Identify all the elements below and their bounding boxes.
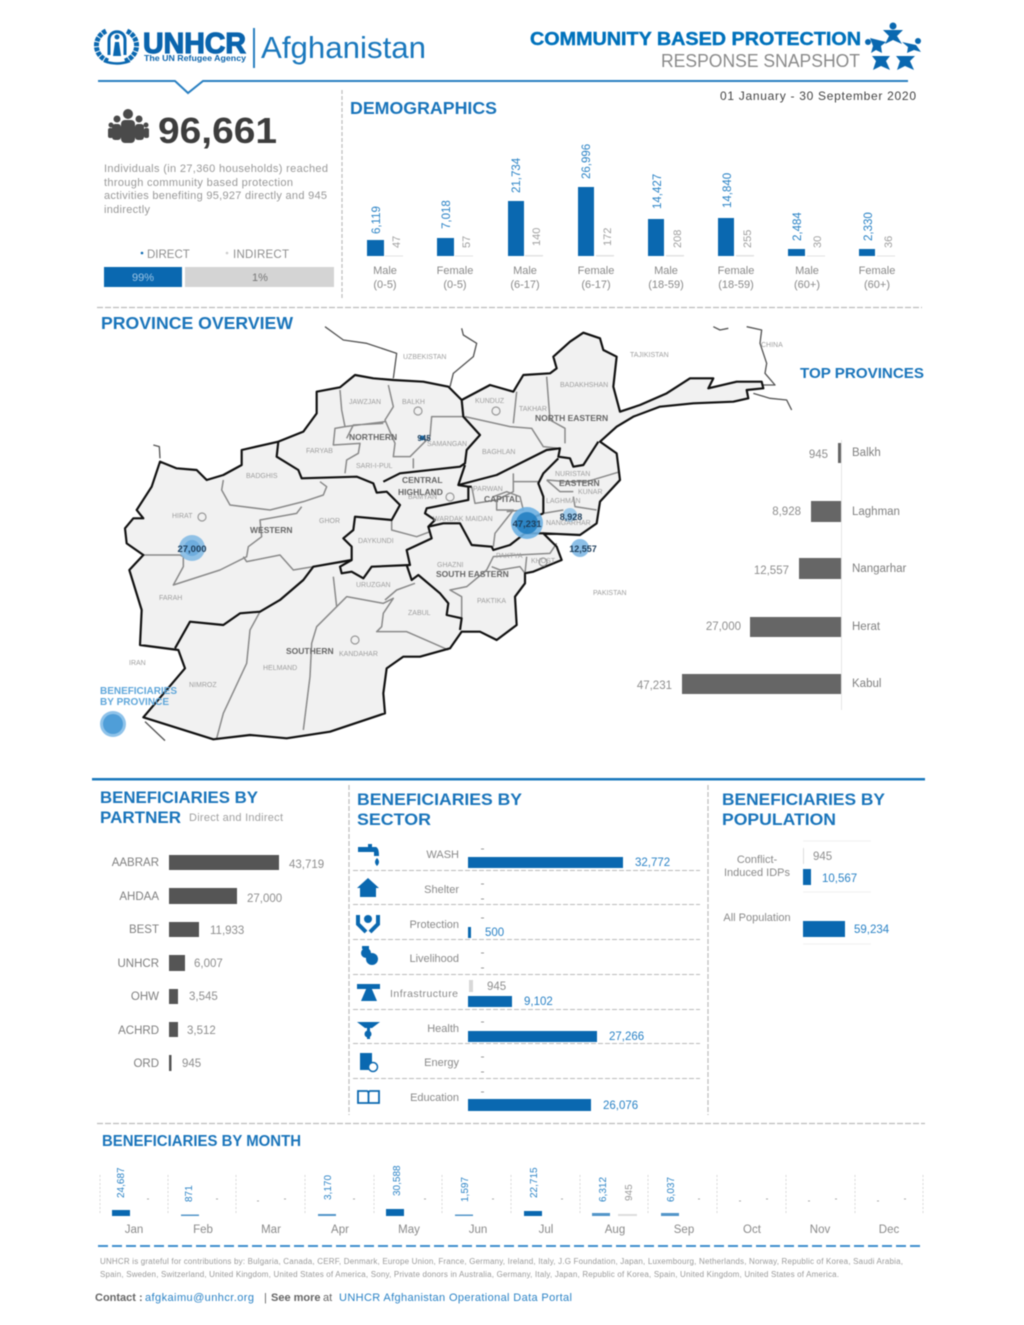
province and neighbour labels: LAGHMAN (546, 498, 581, 505)
bar chart: demographics: 21,734 (511, 157, 523, 193)
bar chart: demographics: 30 (812, 236, 824, 248)
sector labels: Shelter (424, 884, 459, 896)
sector values: 26,076 (603, 1100, 638, 1112)
panel: beneficiaries by partner: AHDAA (119, 891, 159, 903)
country name: Afghanistan (261, 30, 426, 65)
icon: infrastructure road (357, 984, 380, 1001)
province and neighbour labels: UZBEKISTAN (403, 354, 446, 361)
month labels (125, 1224, 899, 1236)
province and neighbour labels: PAKTYA (496, 553, 523, 560)
sector labels: Protection (409, 919, 459, 931)
map reference rings (198, 407, 547, 644)
sector labels: Infrastructure (390, 988, 458, 1000)
panel: beneficiaries by partner (100, 789, 324, 1071)
bar chart: demographics: 36 (883, 236, 895, 248)
total beneficiaries: 96,661 (158, 110, 277, 151)
map: Afghanistan provinces: HIGHLAND (398, 487, 443, 497)
panel: beneficiaries by population (722, 790, 890, 944)
bar chart: demographics: 172 (602, 228, 614, 246)
month values: 22,715 (529, 1167, 540, 1198)
panel: beneficiaries by population: 10,567 (822, 873, 857, 885)
province and neighbour labels: FARAH (159, 595, 182, 602)
province and neighbour labels: BADAKHSHAN (560, 382, 608, 389)
province and neighbour labels: HELMAND (263, 665, 297, 672)
bar chart: demographics: 2,330 (863, 212, 875, 241)
province and neighbour labels: URUZGAN (356, 582, 391, 589)
footer: contact: See more (271, 1292, 321, 1304)
month labels: May (398, 1224, 420, 1236)
province and neighbour labels: WARDAK MAIDAN (433, 516, 493, 523)
bar chart: demographics: Male (795, 265, 819, 277)
province and neighbour labels: GHAZNI (437, 562, 464, 569)
report title (530, 29, 861, 71)
bar chart: demographics (367, 144, 895, 291)
panel: beneficiaries by population: Conflict- (737, 854, 778, 866)
bar chart: demographics: (6-17) (581, 279, 611, 291)
panel: beneficiaries by partner: OHW (131, 991, 159, 1003)
footer: contact: Contact : (95, 1292, 143, 1304)
bar chart: top provinces: 27,000 (706, 621, 741, 633)
month values: 6,312 (598, 1177, 609, 1202)
neighbouring borders (145, 327, 792, 741)
province and neighbour labels: BAMYAN (408, 494, 437, 501)
month values: 3,170 (323, 1175, 334, 1200)
heading: province overview: PROVINCE OVERVIEW (101, 313, 293, 333)
month labels: Apr (331, 1224, 349, 1236)
bar chart: demographics: 2,484 (792, 212, 804, 241)
panel: beneficiaries by population: 945 (813, 851, 832, 863)
month values: 6,037 (666, 1177, 677, 1202)
month values (116, 1165, 677, 1202)
sector bars (468, 857, 623, 1111)
direct vs indirect bar (104, 267, 334, 287)
map legend: BY PROVINCE (100, 697, 169, 708)
province and neighbour labels: KUNAR (578, 489, 603, 496)
panel: beneficiaries by partner: 3,545 (189, 991, 218, 1003)
bar chart: demographics: (6-17) (510, 279, 540, 291)
province and neighbour labels: KUNDUZ (475, 398, 505, 405)
panel: beneficiaries by population: Induced IDPs (724, 867, 791, 879)
sector labels: Energy (424, 1057, 459, 1069)
description: Individuals (in 27,360 households) reached (104, 163, 328, 175)
province and neighbour labels: NIMROZ (189, 682, 217, 689)
month labels: Nov (810, 1224, 830, 1236)
icon: education book (358, 1091, 379, 1103)
bar chart: top provinces: 12,557 (754, 565, 789, 577)
province and neighbour labels: BAGHLAN (482, 449, 515, 456)
panel: beneficiaries by partner: UNHCR (117, 958, 159, 970)
map: Afghanistan provinces: EASTERN (559, 478, 600, 488)
map: Afghanistan provinces: CAPITAL (484, 494, 520, 504)
legend: INDIRECT (233, 249, 289, 261)
province and neighbour labels: KHOST (531, 558, 556, 565)
bar chart: demographics: Male (373, 265, 397, 277)
panel: beneficiaries by partner: ORD (133, 1058, 159, 1070)
panel: beneficiaries by partner: 43,719 (289, 859, 324, 871)
bar chart: demographics: 47 (391, 236, 403, 248)
month bars (112, 1209, 679, 1216)
map: Afghanistan provinces: NORTH EASTERN (535, 413, 608, 423)
report title: COMMUNITY BASED PROTECTION (530, 29, 861, 49)
sector values (485, 857, 670, 1112)
panel: beneficiaries by partner: 27,000 (247, 893, 282, 905)
province and neighbour labels: TAJIKISTAN (630, 352, 669, 359)
wordmark: UNHCR (143, 28, 246, 60)
icon: five blue figures in star ring (865, 22, 921, 70)
month labels: Feb (193, 1224, 213, 1236)
bar chart: demographics: 14,840 (722, 173, 734, 208)
province and neighbour labels: HIRAT (172, 513, 193, 520)
province and neighbour labels: IRAN (129, 660, 146, 667)
panel: beneficiaries by partner: ACHRD (118, 1025, 159, 1037)
map legend: BENEFICIARIES (100, 686, 177, 697)
region boundaries (125, 333, 763, 739)
description: activities benefiting 95,927 directly and 945 (104, 190, 327, 202)
bubble values: 8,928 (560, 512, 582, 522)
province and neighbour labels: SARI-I-PUL (356, 463, 393, 470)
footer: donors: Spain, Sweden, Switzerland, United Kingdom, United States of America, Sony, Private donors in Australia, Germany, Italy, Japan, Republic of Korea, Spain, United Kingdom, United States of America. (100, 1270, 839, 1279)
sector values: 500 (485, 927, 504, 939)
province and neighbour labels: KANDAHAR (339, 651, 378, 658)
month values: 30,588 (392, 1165, 403, 1196)
province and neighbour labels: JAWZJAN (349, 399, 381, 406)
bubble values (177, 434, 597, 555)
bubble values: 12,557 (569, 544, 597, 554)
icon: energy (360, 1053, 378, 1072)
month labels: Jul (539, 1224, 553, 1236)
province and neighbour labels: SAMANGAN (427, 441, 467, 448)
sector labels: Health (427, 1023, 459, 1035)
bar chart: demographics: 57 (461, 236, 473, 248)
footer: contact: | (264, 1292, 267, 1304)
month labels: Sep (674, 1224, 694, 1236)
report title: RESPONSE SNAPSHOT (661, 51, 860, 71)
bar chart: demographics: (0-5) (373, 279, 397, 291)
bar chart: demographics: (18-59) (718, 279, 754, 291)
bubble values: 47,231 (512, 519, 542, 530)
bar chart: demographics: Male (654, 265, 678, 277)
sector labels: WASH (426, 849, 459, 861)
panel: beneficiaries by month (100, 1133, 923, 1236)
bar chart: demographics: Female (578, 265, 614, 277)
bar chart: top provinces: 47,231 (637, 680, 672, 692)
direct vs indirect bar: 1% (252, 272, 268, 284)
panel: beneficiaries by partner: BEST (129, 924, 159, 936)
bar chart: top provinces (637, 440, 907, 710)
map: Afghanistan provinces: NORTHERN (349, 432, 397, 442)
province and neighbour labels: PARWAN (473, 486, 503, 493)
bar chart: demographics: (60+) (864, 279, 890, 291)
heading: top provinces: TOP PROVINCES (800, 365, 924, 382)
month values: 1,597 (460, 1177, 471, 1202)
country fill and boundary, west part coordinates (125, 327, 792, 741)
bar chart: top provinces: 945 (809, 449, 828, 461)
province and neighbour labels (129, 342, 783, 689)
bar chart: top provinces: 8,928 (772, 506, 801, 518)
sector values: 27,266 (609, 1031, 644, 1043)
footer: donors: UNHCR is grateful for contributions by: Bulgaria, Canada, CERF, Denmark, Europe Union, France, Germany, Ireland, Italy, J.G Foundation, Japan, Luxembourg, Netherlands, Norway, Republic of Korea, Saudi Arabia, (100, 1257, 903, 1266)
bar chart: demographics: 6,119 (371, 206, 383, 234)
footer: contact: afgkaimu@unhcr.org (145, 1292, 254, 1304)
sector values: 9,102 (524, 996, 553, 1008)
panel: beneficiaries by sector (353, 790, 700, 1112)
sector labels: Education (410, 1092, 459, 1104)
tagline: The UN Refugee Agency (144, 53, 246, 63)
month labels: Jan (125, 1224, 143, 1236)
header logo: UNHCR Afghanistan (96, 28, 426, 68)
bar chart: demographics: 140 (531, 228, 543, 246)
province and neighbour labels: NANGARHAR (546, 520, 591, 527)
bar chart: demographics: 255 (742, 230, 754, 248)
map: Afghanistan provinces: SOUTHERN (286, 646, 334, 656)
panel: beneficiaries by partner: Direct and Indirect (189, 812, 283, 824)
map: Afghanistan provinces: WESTERN (250, 525, 292, 535)
bar chart: top provinces: Kabul (852, 678, 881, 690)
province and neighbour labels: PAKTIKA (477, 598, 506, 605)
bar chart: demographics: 208 (672, 230, 684, 248)
footer: contact: UNHCR Afghanistan Operational Data Portal (339, 1292, 572, 1304)
month values: 871 (184, 1185, 195, 1202)
description: indirectly (104, 204, 150, 216)
panel: beneficiaries by partner: 3,512 (187, 1025, 216, 1037)
bar chart: top provinces: Nangarhar (852, 563, 907, 575)
province and neighbour labels: PAKISTAN (593, 590, 627, 597)
bar chart: demographics: (60+) (794, 279, 820, 291)
panel: beneficiaries by population: 59,234 (854, 924, 890, 936)
province and neighbour labels: BALKH (402, 399, 425, 406)
icon: livelihood (361, 946, 378, 965)
panel: beneficiaries by month: 945 (624, 1184, 635, 1201)
icon: group of people (108, 109, 149, 143)
footer: contact (95, 1292, 572, 1304)
sector labels (390, 849, 459, 1104)
heading: demographics: DEMOGRAPHICS (350, 98, 497, 118)
panel: beneficiaries by sector: 945 (487, 981, 506, 993)
month labels: Dec (879, 1224, 899, 1236)
legend: DIRECT (147, 249, 190, 261)
map: Afghanistan provinces: SOUTH EASTERN (436, 569, 509, 579)
bar chart: top provinces: Laghman (852, 506, 900, 518)
month labels: Mar (261, 1224, 281, 1236)
province lines (143, 377, 620, 738)
panel: beneficiaries by sector: SECTOR (357, 810, 431, 829)
description (104, 163, 328, 216)
icon: health caduceus (357, 1022, 380, 1039)
bar chart: demographics: (18-59) (648, 279, 684, 291)
bar chart: top provinces: Balkh (852, 447, 881, 459)
description: through community based protection (104, 177, 293, 189)
province and neighbour labels: DAYKUNDI (358, 538, 394, 545)
bar chart: demographics: Female (718, 265, 754, 277)
province and neighbour labels: ZABUL (408, 610, 431, 617)
bars (169, 855, 279, 1071)
panel: beneficiaries by population: All Population (723, 912, 791, 924)
bar chart: demographics: Female (859, 265, 895, 277)
heading: BENEFICIARIES BY (100, 789, 258, 807)
bubble values: 945 (417, 434, 431, 443)
direct vs indirect bar: 99% (132, 272, 154, 284)
icon: shelter (357, 878, 379, 897)
heading: BENEFICIARIES BY MONTH (102, 1133, 301, 1150)
panel: beneficiaries by population: POPULATION (722, 810, 836, 829)
month labels: Jun (469, 1224, 487, 1236)
bubble values: 27,000 (177, 544, 207, 555)
bubbles: beneficiaries by province (179, 436, 589, 561)
footer: contact: at (323, 1292, 332, 1304)
heading: BENEFICIARIES BY (722, 790, 886, 809)
province and neighbour labels: GHOR (319, 518, 340, 525)
province and neighbour labels: NURISTAN (555, 471, 590, 478)
panel: beneficiaries by partner: 6,007 (194, 958, 223, 970)
icon: protection hands (358, 915, 378, 932)
month labels: Aug (605, 1224, 625, 1236)
icon: UNHCR wreath emblem (96, 31, 137, 64)
sector values: 32,772 (635, 857, 670, 869)
bar chart: demographics: 26,996 (581, 144, 593, 179)
province and neighbour labels: FARYAB (306, 448, 333, 455)
sector labels: Livelihood (409, 953, 459, 965)
bar chart: demographics: (0-5) (443, 279, 467, 291)
footer: donors (100, 1257, 903, 1279)
panel: beneficiaries by partner: PARTNER (100, 809, 181, 827)
province and neighbour labels: BADGHIS (246, 473, 278, 480)
month values: 24,687 (116, 1167, 127, 1198)
map legend (100, 686, 177, 737)
panel: headline figures (104, 109, 334, 287)
province and neighbour labels: TAKHAR (519, 406, 547, 413)
bar chart: top provinces: Herat (852, 621, 881, 633)
panel: beneficiaries by partner: AABRAR (112, 857, 159, 869)
province and neighbour labels: CHINA (761, 342, 783, 349)
icon: water tap (358, 844, 379, 866)
map: Afghanistan provinces: CENTRAL (402, 475, 443, 485)
panel: beneficiaries by partner: 945 (182, 1058, 201, 1070)
bar chart: demographics: 7,018 (441, 200, 453, 229)
bar chart: demographics: Female (437, 265, 473, 277)
month labels: Oct (743, 1224, 762, 1236)
map: Afghanistan provinces (100, 327, 792, 741)
panel: beneficiaries by partner: 11,933 (210, 925, 244, 937)
legend (141, 249, 289, 261)
heading: BENEFICIARIES BY (357, 790, 523, 809)
bar chart: demographics: 14,427 (652, 174, 664, 209)
date range: 01 January - 30 September 2020 (720, 89, 916, 103)
header rule with chevron (98, 81, 908, 93)
bar chart: demographics: Male (513, 265, 537, 277)
